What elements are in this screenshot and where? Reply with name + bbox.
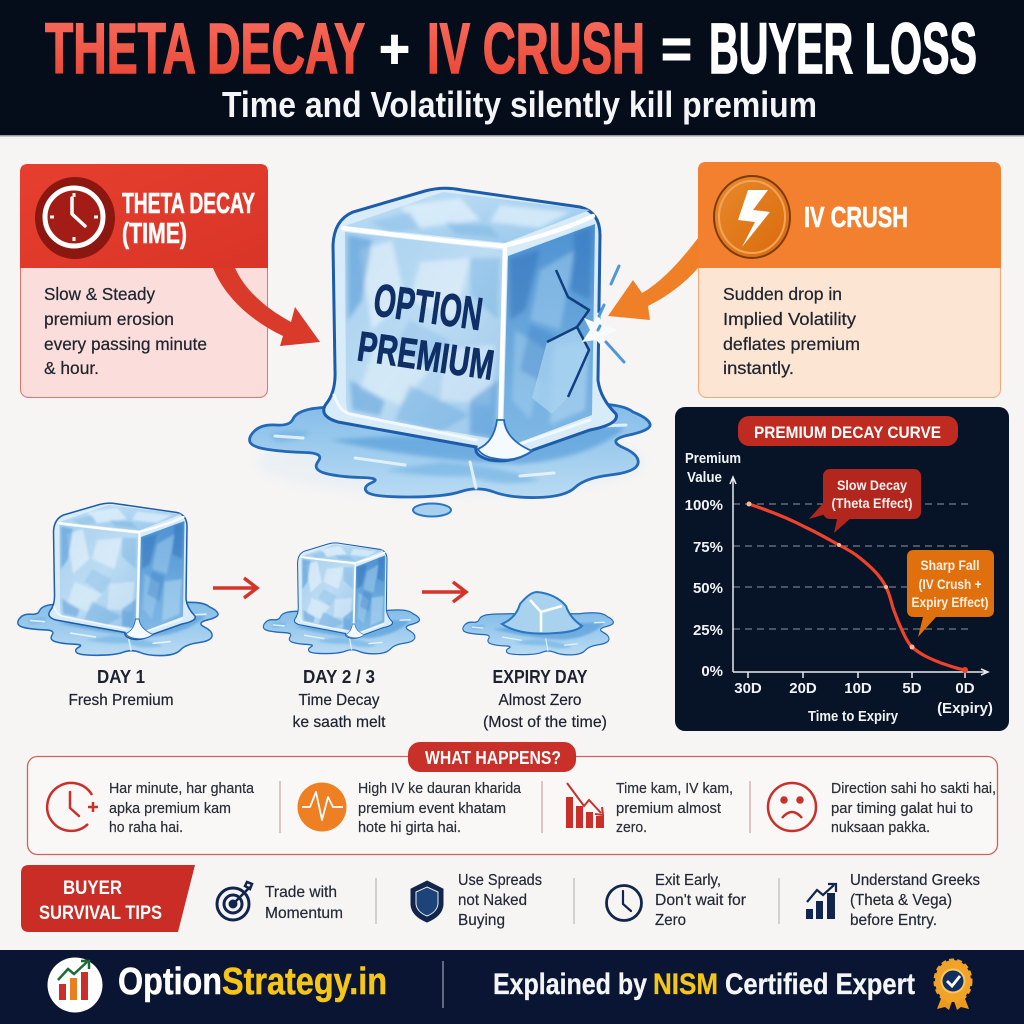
text: tip 2: not Naked (458, 892, 527, 909)
certified text: NISM (653, 968, 718, 1001)
cube label: OPTION (371, 273, 486, 340)
panel: what happens (28, 742, 998, 854)
logo: chart badge (48, 958, 102, 1012)
axis title: premium value: Value (687, 469, 722, 486)
heading: theta decay: THETA DECAY (122, 188, 255, 220)
stage: expiry day (463, 592, 613, 731)
stage: day 2 / 3 (263, 543, 420, 731)
text: item 4: nuksaan pakka. (831, 819, 930, 836)
y axis labels: 100% (685, 497, 723, 514)
y axis labels: 0% (701, 663, 723, 680)
text: item 1 (109, 780, 255, 836)
text: item 1: apka premium kam (109, 800, 231, 817)
text: item 2: High IV ke dauran kharida (358, 780, 522, 797)
arrow: iv crush to cube (608, 238, 698, 320)
icon: shield (411, 881, 443, 922)
arrow: theta to cube (213, 268, 320, 346)
y axis labels (685, 497, 723, 680)
text: iv crush description: deflates premium (723, 334, 860, 354)
header band (0, 0, 1024, 136)
text: item 3: premium almost (616, 800, 722, 817)
brand name (118, 961, 387, 1003)
label: day 2 / 3 (292, 667, 386, 731)
text: item 2: hote hi girta hai. (358, 819, 461, 836)
banner: buyer survival tips (21, 865, 195, 932)
x axis labels: (Expiry) (937, 700, 993, 717)
axis title: premium value: Premium (685, 450, 741, 467)
axis title: premium value (685, 450, 741, 486)
icon: certified badge (935, 960, 971, 1010)
survival tips row (217, 872, 980, 929)
text: tip 3 (655, 872, 747, 929)
text: iv crush description: instantly. (723, 358, 794, 378)
title (45, 10, 977, 89)
text: item 4: Direction sahi ho sakti hai, (831, 780, 996, 797)
text: tip 1: Momentum (265, 905, 343, 922)
certified text: Certified Expert (725, 968, 915, 1001)
heading: theta decay: (TIME) (122, 218, 187, 250)
label: expiry day: (Most of the time) (483, 714, 607, 731)
text: iv crush description (723, 284, 860, 378)
text: item 2: premium event khatam (358, 800, 506, 817)
title: IV CRUSH (427, 10, 645, 89)
text: tip 3: Don't wait for (655, 892, 747, 909)
text: tip 3: Zero (655, 912, 686, 929)
text: tip 3: Exit Early, (655, 872, 721, 889)
subtitle: Time and Volatility silently kill premium (222, 84, 817, 125)
text: item 3 (616, 780, 733, 836)
icon: sad face (768, 783, 816, 831)
banner: buyer survival tips: SURVIVAL TIPS (39, 903, 162, 924)
text: tip 4: before Entry. (850, 912, 937, 929)
decay curve (746, 502, 968, 673)
axes (730, 477, 988, 678)
y axis labels: 25% (693, 622, 723, 639)
text: item 2 (358, 780, 522, 836)
label: day 1: DAY 1 (97, 667, 145, 687)
text: tip 4: (Theta & Vega) (850, 892, 952, 909)
text: item 1: ho raha hai. (109, 819, 183, 836)
heading: theta decay (122, 188, 255, 250)
callout: slow decay: Slow Decay (837, 477, 907, 493)
text: tip 1: Trade with (265, 884, 337, 901)
label: expiry day: EXPIRY DAY (492, 667, 588, 687)
callout: sharp fall: (IV Crush + (918, 576, 982, 592)
certified text: Explained by (493, 968, 647, 1001)
callout: sharp fall: Expiry Effect) (912, 594, 988, 610)
callout: sharp fall: Sharp Fall (920, 557, 980, 573)
text: tip 2 (458, 872, 542, 929)
certified text (493, 968, 915, 1001)
text: item 4: par timing galat hui to (831, 800, 973, 817)
text: item 3: zero. (616, 819, 647, 836)
text: item 4 (831, 780, 996, 836)
text: theta description: every passing minute (44, 334, 207, 354)
stage: day 1 (18, 503, 218, 709)
brand name: Strategy.in (222, 961, 387, 1003)
crack and shards (532, 266, 624, 414)
label: day 2 / 3: DAY 2 / 3 (303, 667, 375, 687)
text: item 3: Time kam, IV kam, (616, 780, 733, 797)
callout: slow decay: (Theta Effect) (832, 495, 912, 511)
label: expiry day (483, 667, 607, 731)
text: theta description (44, 284, 207, 378)
x axis labels: 0D (955, 680, 975, 697)
callout: sharp fall (907, 550, 994, 637)
chart title: PREMIUM DECAY CURVE (754, 423, 941, 442)
callout: slow decay (809, 469, 921, 533)
text: iv crush description: Implied Volatility (723, 309, 856, 329)
icon: target (217, 882, 252, 920)
text: tip 4 (850, 872, 980, 929)
label: day 1 (68, 667, 174, 709)
label: day 1: Fresh Premium (68, 692, 174, 709)
x axis labels: Time to Expiry (808, 708, 899, 725)
footer band (0, 950, 1024, 1024)
label: day 2 / 3: Time Decay (298, 692, 380, 709)
text: tip 2: Use Spreads (458, 872, 542, 889)
icon: clock (35, 177, 115, 259)
y axis labels: 75% (693, 539, 723, 556)
icon: clock (606, 886, 642, 920)
x axis labels: 5D (902, 680, 922, 697)
brand name: Option (118, 961, 222, 1003)
text: tip 2: Buying (458, 912, 505, 929)
heading: what happens: WHAT HAPPENS? (425, 748, 561, 768)
title: = (661, 17, 692, 80)
chart title (738, 416, 958, 446)
x axis labels: 20D (789, 680, 817, 697)
arrow: day 2 to expiry (422, 582, 466, 602)
heading: iv crush: IV CRUSH (804, 202, 908, 234)
icon: volatility wave (298, 782, 346, 832)
icon: clock outline (47, 783, 98, 831)
x axis labels (734, 680, 993, 725)
panel: premium decay curve (675, 407, 1009, 731)
icon: lightning bolt (714, 176, 790, 258)
text: tip 4: Understand Greeks (850, 872, 980, 889)
x axis labels: 10D (844, 680, 872, 697)
x axis labels: 30D (734, 680, 762, 697)
text: theta description: premium erosion (44, 309, 174, 329)
title: + (379, 17, 410, 80)
illustration: melting ice cube (250, 188, 650, 516)
heading: what happens (408, 742, 576, 772)
panel: iv crush (698, 162, 1001, 398)
banner: buyer survival tips: BUYER (63, 878, 122, 899)
icon: falling bars (566, 783, 604, 828)
title: THETA DECAY (45, 10, 365, 89)
label: day 2 / 3: ke saath melt (292, 714, 386, 731)
arrow: day 1 to day 2 (213, 578, 257, 598)
panel: theta decay (20, 164, 268, 398)
text: tip 1 (265, 884, 343, 922)
text: theta description: Slow & Steady (44, 284, 155, 304)
text: item 1: Har minute, har ghanta (109, 780, 255, 797)
cube label: PREMIUM (355, 322, 497, 389)
text: iv crush description: Sudden drop in (723, 284, 842, 304)
icon: growth chart (806, 884, 836, 919)
y axis labels: 50% (693, 580, 723, 597)
text: theta description: & hour. (44, 358, 99, 378)
cube label (355, 273, 497, 389)
label: expiry day: Almost Zero (498, 692, 582, 709)
